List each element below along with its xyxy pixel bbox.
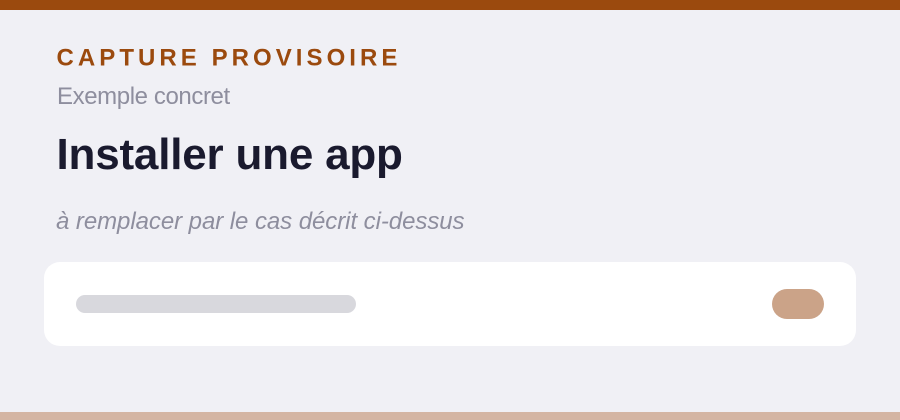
- eyebrow label: CAPTURE PROVISOIRE: [56, 44, 401, 72]
- placeholder text bar: [76, 295, 356, 313]
- italic note: à remplacer par le cas décrit ci-dessus: [56, 208, 465, 235]
- bottom accent bar: [0, 412, 900, 420]
- placeholder card: [44, 262, 856, 346]
- placeholder button: [772, 289, 824, 319]
- subtitle: Exemple concret: [57, 83, 230, 110]
- heading: Installer une app: [56, 130, 403, 179]
- top accent bar: [0, 0, 900, 10]
